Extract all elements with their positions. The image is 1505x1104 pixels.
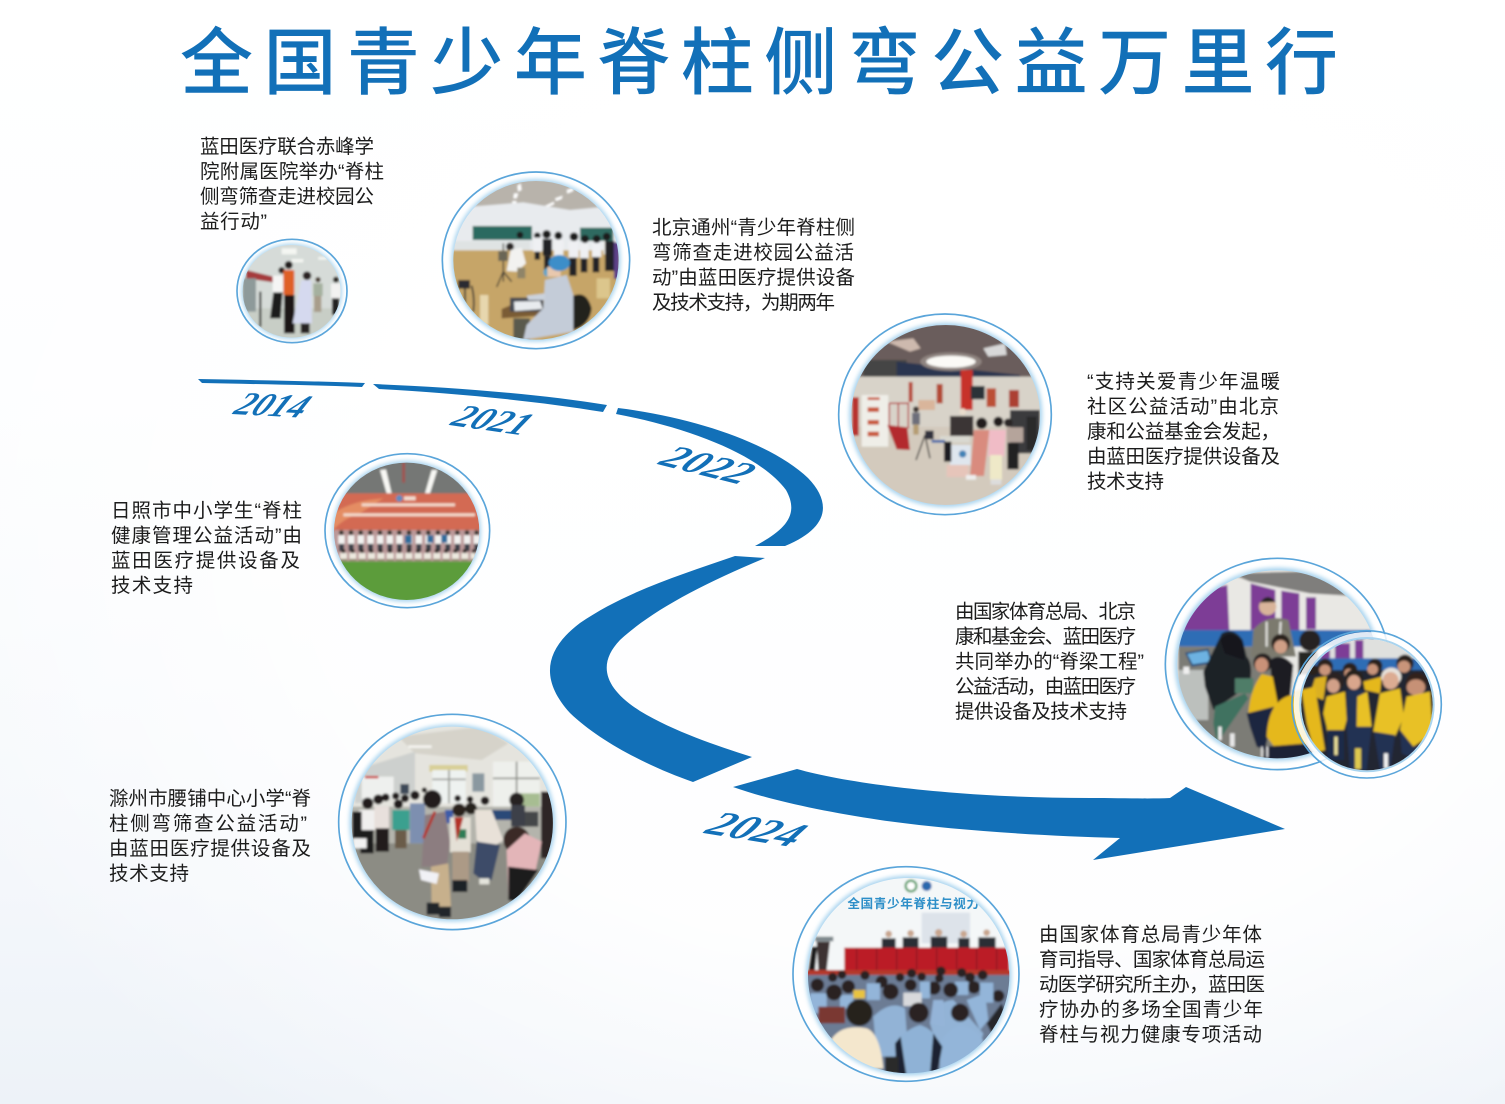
- text: Chuzhou school screening: 技术支持: [109, 863, 189, 885]
- text: national special activity: 疗协办的多场全国青少年: [1039, 999, 1263, 1021]
- text: Chifeng campus action: [200, 136, 384, 233]
- text: Rizhao activity: 日照市中小学生“脊柱: [111, 500, 302, 522]
- text: Spine beam project: 提供设备及技术支持: [955, 701, 1127, 723]
- year label 2014: 2014: [227, 385, 318, 425]
- photo circle: children in yellow jackets: [1292, 631, 1441, 778]
- photo circle: 2014 height screening: [237, 239, 347, 343]
- text: national special activity: 脊柱与视力健康专项活动: [1039, 1024, 1262, 1046]
- text: Spine beam project: 公益活动，由蓝田医疗: [955, 676, 1136, 698]
- text: Chifeng campus action: 院附属医院举办“脊柱: [200, 161, 384, 183]
- photo circle: Tongzhou school screening: [442, 172, 630, 349]
- title: 全国青少年脊柱侧弯公益万里行: [180, 23, 1338, 104]
- text: Spine beam project: 康和基金会、蓝田医疗: [955, 626, 1136, 648]
- text: Chifeng campus action: 侧弯筛查走进校园公: [200, 186, 374, 208]
- text: Tongzhou school screening: 及技术支持，为期两年: [652, 292, 835, 314]
- year label 2024: 2024: [696, 805, 815, 855]
- text: Rizhao activity: [111, 500, 302, 597]
- photo circle: community event: [839, 314, 1051, 515]
- text: Spine beam project: [955, 601, 1144, 723]
- text: Rizhao activity: 蓝田医疗提供设备及: [111, 550, 300, 572]
- photo banner text: 全国青少年脊柱与视力: [847, 896, 979, 911]
- text: Chifeng campus action: 蓝田医疗联合赤峰学: [200, 136, 374, 158]
- text: community event: 康和公益基金会发起，: [1087, 421, 1280, 443]
- photo circle: national special activity: [793, 867, 1019, 1081]
- text: Rizhao activity: 技术支持: [111, 575, 193, 597]
- text: community event: 由蓝田医疗提供设备及: [1087, 446, 1280, 468]
- text: community event: 社区公益活动”由北京: [1087, 396, 1279, 418]
- text: national special activity: 由国家体育总局青少年体: [1039, 924, 1262, 946]
- text: Spine beam project: 由国家体育总局、北京: [955, 601, 1136, 623]
- text: national special activity: 育司指导、国家体育总局运: [1039, 949, 1265, 971]
- text: Chifeng campus action: 益行动”: [200, 211, 267, 233]
- text: national special activity: 动医学研究所主办，蓝田医: [1039, 974, 1265, 996]
- text: Chuzhou school screening: [109, 788, 311, 885]
- text: Chuzhou school screening: 由蓝田医疗提供设备及: [109, 838, 311, 860]
- text: Rizhao activity: 健康管理公益活动”由: [111, 525, 302, 547]
- text: community event: 技术支持: [1087, 471, 1164, 493]
- year label 2021: 2021: [443, 399, 541, 443]
- text: Tongzhou school screening: [652, 217, 855, 314]
- text: Chuzhou school screening: 滁州市腰铺中心小学“脊: [109, 788, 311, 810]
- text: national special activity: [1039, 924, 1265, 1046]
- photo circle: classroom teacher and children: [1165, 558, 1389, 770]
- photo circle: Chuzhou school screening: [339, 714, 566, 930]
- text: community event: [1087, 371, 1280, 493]
- timeline ribbon with arrow: [198, 379, 1285, 860]
- year label 2022: 2022: [650, 438, 765, 491]
- photo circle: Rizhao group photo: [325, 454, 490, 608]
- text: Tongzhou school screening: 动”由蓝田医疗提供设备: [652, 267, 855, 289]
- text: Tongzhou school screening: 北京通州“青少年脊柱侧: [652, 217, 855, 239]
- text: Chuzhou school screening: 柱侧弯筛查公益活动”: [109, 813, 307, 835]
- text: Spine beam project: 共同举办的“脊梁工程”: [955, 651, 1144, 673]
- text: Tongzhou school screening: 弯筛查走进校园公益活: [652, 242, 854, 264]
- text: community event: “支持关爱青少年温暖: [1087, 371, 1280, 393]
